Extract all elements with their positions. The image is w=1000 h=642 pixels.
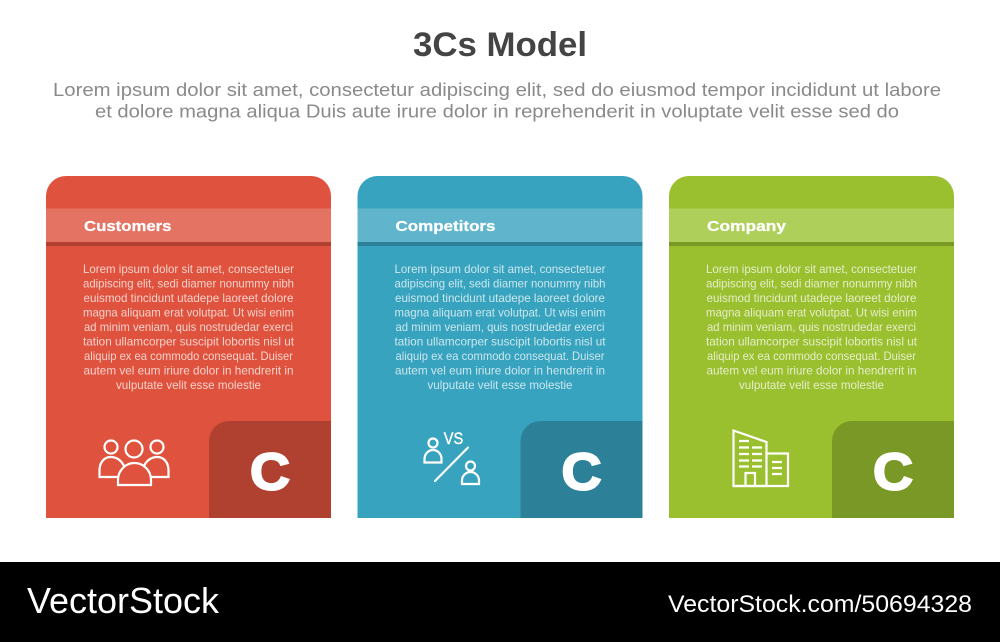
footer logo text: VectorStock bbox=[27, 580, 220, 621]
intro text: et dolore magna aliqua Duis aute irure dolor in reprehenderit in voluptate velit esse sed do bbox=[95, 100, 899, 122]
body text bbox=[706, 263, 918, 392]
footer bar bbox=[0, 562, 1000, 642]
heading: competitors: Competitors bbox=[396, 219, 496, 235]
letter C: C bbox=[873, 444, 913, 502]
card background bbox=[46, 176, 331, 518]
body text: tation ullamcorper suscipit lobortis nisl ut bbox=[706, 336, 918, 348]
body text: ad minim veniam, quis nostrudedar exerci bbox=[707, 321, 916, 334]
intro text bbox=[53, 79, 941, 122]
title: 3Cs Model bbox=[413, 26, 587, 64]
panel: competitors bbox=[358, 176, 642, 518]
body text: autem vel eum iriure dolor in hendrerit in bbox=[395, 364, 605, 378]
header underline bbox=[358, 242, 642, 246]
body text bbox=[83, 263, 295, 392]
letter tab bbox=[520, 421, 642, 518]
body text: autem vel eum iriure dolor in hendrerit in bbox=[84, 364, 294, 378]
body text: magna aliquam erat volutpat. Ut wisi enim bbox=[706, 306, 917, 320]
header band bbox=[358, 208, 642, 242]
body text: adipiscing elit, sedi diamer nonummy nibh bbox=[83, 278, 294, 290]
body text: magna aliquam erat volutpat. Ut wisi enim bbox=[83, 306, 294, 320]
intro text: Lorem ipsum dolor sit amet, consectetur adipiscing elit, sed do eiusmod tempor incididunt ut labore bbox=[53, 79, 941, 100]
body text: ad minim veniam, quis nostrudedar exerci bbox=[396, 321, 604, 334]
footer url: VectorStock.com/50694328 bbox=[668, 591, 972, 618]
header underline bbox=[669, 242, 954, 246]
header underline bbox=[46, 242, 331, 246]
header band bbox=[46, 208, 331, 242]
body text: tation ullamcorper suscipit lobortis nisl ut bbox=[394, 336, 606, 348]
body text bbox=[394, 263, 606, 392]
body text: aliquip ex ea commodo consequat. Duiser bbox=[84, 350, 293, 363]
body text: ad minim veniam, quis nostrudedar exerci bbox=[84, 321, 293, 334]
body text: euismod tincidunt utadepe laoreet dolore bbox=[84, 292, 294, 305]
body text: Lorem ipsum dolor sit amet, consectetuer bbox=[83, 263, 294, 276]
body text: aliquip ex ea commodo consequat. Duiser bbox=[707, 350, 916, 363]
card background bbox=[358, 176, 642, 518]
body text: vulputate velit esse molestie bbox=[428, 379, 572, 392]
icon: versus bbox=[424, 430, 479, 484]
icon: people bbox=[100, 440, 168, 485]
icon: building bbox=[734, 430, 788, 486]
card background bbox=[669, 176, 954, 518]
letter C: C bbox=[250, 444, 290, 502]
panel: company bbox=[669, 176, 954, 518]
body text: euismod tincidunt utadepe laoreet dolore bbox=[706, 292, 916, 305]
icon: versus: VS bbox=[444, 430, 463, 448]
body text: aliquip ex ea commodo consequat. Duiser bbox=[396, 350, 605, 363]
header band bbox=[669, 208, 954, 242]
body text: magna aliquam erat volutpat. Ut wisi enim bbox=[394, 306, 606, 320]
heading: company: Company bbox=[707, 219, 786, 235]
letter C: C bbox=[562, 444, 602, 502]
body text: vulputate velit esse molestie bbox=[739, 379, 884, 392]
panel: customers bbox=[46, 176, 331, 518]
body text: tation ullamcorper suscipit lobortis nisl ut bbox=[83, 336, 295, 348]
letter tab bbox=[209, 421, 331, 518]
body text: adipiscing elit, sedi diamer nonummy nibh bbox=[706, 278, 917, 290]
body text: Lorem ipsum dolor sit amet, consectetuer bbox=[394, 263, 606, 276]
body text: vulputate velit esse molestie bbox=[116, 379, 261, 392]
body text: euismod tincidunt utadepe laoreet dolore bbox=[395, 292, 605, 305]
heading: customers: Customers bbox=[84, 219, 172, 235]
body text: autem vel eum iriure dolor in hendrerit in bbox=[706, 364, 916, 378]
body text: adipiscing elit, sedi diamer nonummy nibh bbox=[394, 278, 606, 290]
body text: Lorem ipsum dolor sit amet, consectetuer bbox=[706, 263, 917, 276]
letter tab bbox=[832, 421, 954, 518]
